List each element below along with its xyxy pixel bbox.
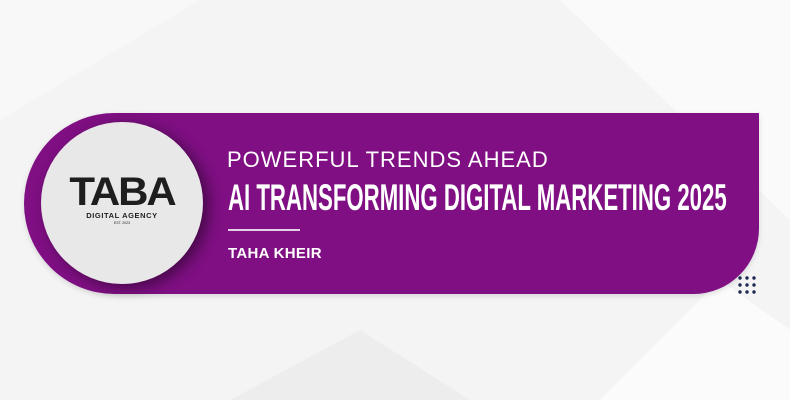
title: AI TRANSFORMING DIGITAL MARKETING 2025: [228, 177, 727, 218]
banner: [24, 113, 759, 294]
logo text: DIGITAL AGENCY: [86, 211, 158, 220]
logo text: EST. 2023: [114, 221, 130, 225]
icon: dot grid: [738, 276, 756, 294]
subtitle: POWERFUL TRENDS AHEAD: [227, 147, 549, 172]
divider: [228, 229, 300, 231]
author: TAHA KHEIR: [228, 245, 322, 262]
logo circle: [41, 122, 203, 284]
logo text: TABA: [69, 170, 175, 214]
